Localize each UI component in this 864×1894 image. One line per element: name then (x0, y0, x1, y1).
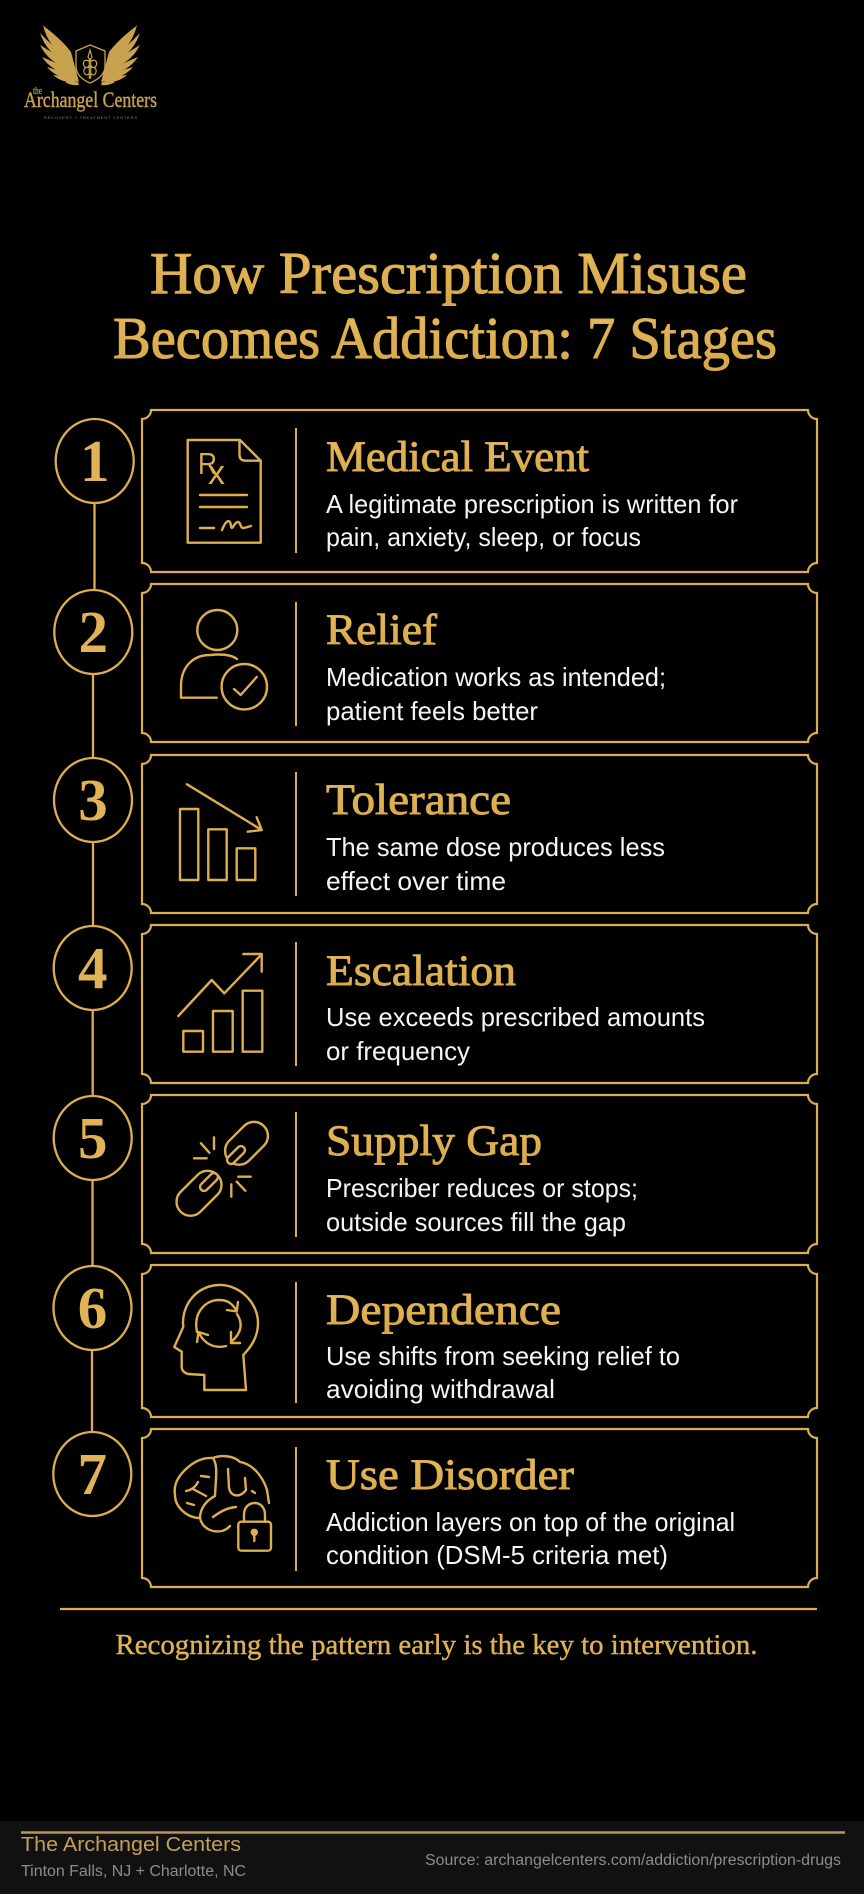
stage 5: Supply Gap: Supply Gap (326, 1118, 542, 1165)
logo: The Archangel Centers: Archangel Centers (24, 87, 157, 112)
stage 2: Relief (54, 584, 817, 742)
icon: prescription document: R (198, 446, 217, 481)
stage 1: Medical Event: pain, anxiety, sleep, or focus (326, 522, 641, 552)
stage 3: Tolerance: effect over time (326, 866, 506, 896)
logo: The Archangel Centers (24, 25, 157, 120)
tagline: Recognizing the pattern early is the key to intervention. (116, 1629, 758, 1661)
stage 4: Escalation: 4 (78, 935, 107, 1001)
stage 4: Escalation: Escalation (326, 948, 516, 995)
stage 3: Tolerance: The same dose produces less (326, 832, 665, 862)
logo: The Archangel Centers: RECOVERY + TREATMENT CENTERS (44, 115, 137, 120)
stage 6: Dependence: 6 (78, 1275, 107, 1341)
stage 3: Tolerance: 3 (78, 767, 108, 833)
stage 3: Tolerance (54, 755, 817, 913)
stage 6: Dependence (54, 1265, 817, 1417)
stage 5: Supply Gap: 5 (78, 1105, 107, 1171)
stage 1: Medical Event: 1 (80, 428, 109, 494)
icon: broken chain link (171, 1116, 274, 1222)
stage 1: Medical Event (56, 410, 817, 572)
footer: The Archangel Centers (21, 1833, 241, 1856)
logo: The Archangel Centers: the (33, 86, 42, 97)
stage 2: Relief: patient feels better (326, 696, 538, 726)
icon: head with cycle arrows (174, 1285, 258, 1390)
stage 5: Supply Gap: Prescriber reduces or stops; (326, 1173, 638, 1203)
stage 4: Escalation: or frequency (326, 1036, 470, 1066)
icon: prescription document (188, 440, 261, 543)
title: How Prescription Misuse (150, 240, 747, 306)
stage 7: Use Disorder: Use Disorder (326, 1452, 574, 1499)
stage 7: Use Disorder: Addiction layers on top of the original (326, 1507, 735, 1537)
timeline connector (92, 503, 94, 1432)
icon: prescription document: x (208, 454, 225, 492)
icon: brain with padlock (175, 1456, 271, 1551)
icon: rising bars (178, 954, 262, 1052)
title: Becomes Addiction: 7 Stages (113, 305, 777, 371)
stage 6: Dependence: Use shifts from seeking relief to (326, 1341, 680, 1371)
stage 1: Medical Event: Medical Event (326, 434, 589, 481)
footer: Tinton Falls, NJ + Charlotte, NC (21, 1863, 246, 1880)
stage 5: Supply Gap (54, 1095, 817, 1253)
stage 3: Tolerance: Tolerance (326, 777, 511, 824)
stage 2: Relief: Relief (326, 607, 438, 654)
icon: person with check (181, 610, 267, 709)
stage 7: Use Disorder (53, 1429, 817, 1587)
stage 1: Medical Event: A legitimate prescription is written for (326, 489, 738, 519)
stage 5: Supply Gap: outside sources fill the gap (326, 1207, 626, 1237)
stage 7: Use Disorder: 7 (78, 1441, 107, 1507)
stage 4: Escalation: Use exceeds prescribed amounts (326, 1002, 705, 1032)
footer (0, 1821, 864, 1894)
stage 7: Use Disorder: condition (DSM-5 criteria met) (326, 1540, 668, 1570)
stage 6: Dependence: avoiding withdrawal (326, 1374, 555, 1404)
stage 2: Relief: Medication works as intended; (326, 662, 666, 692)
stage 2: Relief: 2 (79, 599, 108, 665)
title (113, 240, 777, 371)
stage 4: Escalation (54, 925, 817, 1083)
stage 6: Dependence: Dependence (326, 1287, 561, 1334)
footer: Source: archangelcenters.com/addiction/prescription-drugs (425, 1852, 841, 1869)
icon: declining bars (180, 784, 262, 880)
